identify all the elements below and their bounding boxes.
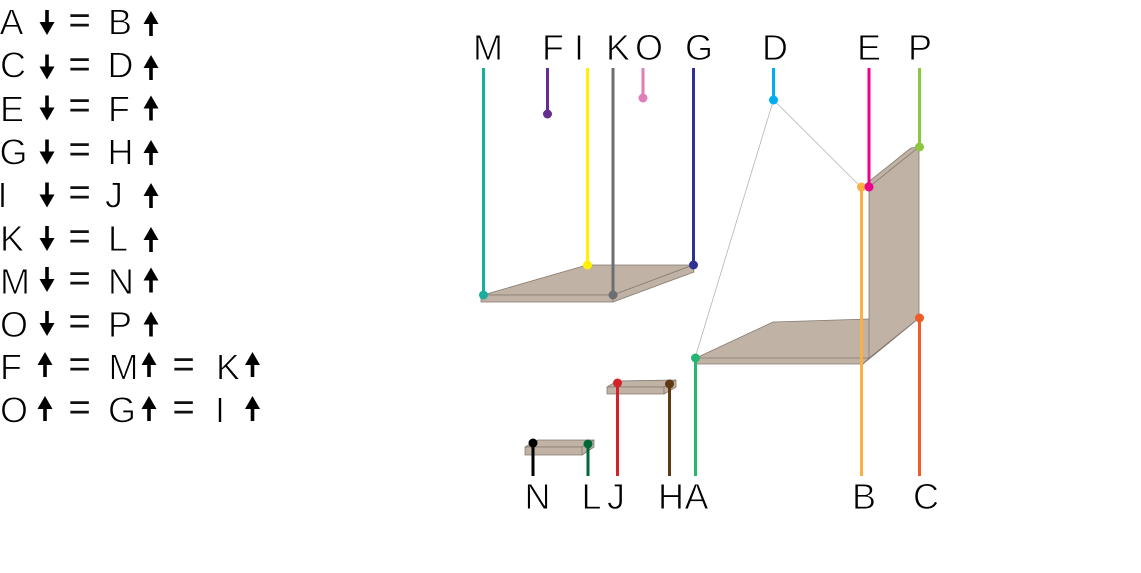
equation: O up equals G up equals I up: I [215,390,225,430]
equation: F up equals M up equals K up: = [68,344,91,386]
thin connector lines from D [695,100,861,358]
rope G [689,68,698,270]
rope K [608,68,618,300]
equation: A down equals B up [0,0,158,42]
rope B [857,182,866,476]
equation: E down equals F up: E [0,88,24,130]
diagram bottom labels: C [913,476,939,517]
diagram bottom labels: A [684,476,709,517]
rope D [769,68,778,104]
equation: E down equals F up [0,85,158,130]
rope J [613,378,622,476]
equation: G down equals H up [0,129,158,172]
diagram bottom labels: H [658,476,684,517]
rope N [528,438,538,476]
equation: E down equals F up: F [108,88,130,130]
equation: O down equals P up: = [68,301,91,343]
rope M [479,68,488,300]
equation: F up equals M up equals K up [0,344,260,388]
equation: F up equals M up equals K up: K [216,346,240,388]
diagram top labels: M [473,27,503,68]
equation: M down equals N up: = [68,258,91,300]
equation: M down equals N up [0,258,158,302]
equation: O down equals P up: O [0,304,28,345]
equation: A down equals B up: B [108,2,132,42]
rope F [543,68,552,118]
equation: G down equals H up: G [0,132,28,172]
equation: F up equals M up equals K up: F [0,346,22,388]
equation: A down equals B up: = [68,0,91,42]
equation: I down equals J up: J [105,174,123,216]
rope E [864,68,874,192]
diagram top labels: G [685,27,713,68]
equation: O up equals G up equals I up: O [0,390,28,430]
equation: K down equals L up: = [68,216,91,258]
diagram top labels: E [857,27,881,68]
diagram bottom labels: J [607,476,625,517]
equation: M down equals N up: N [108,261,134,302]
plate: smallest lower platform [525,440,594,455]
equation: K down equals L up: K [0,218,24,259]
diagram bottom labels: N [524,476,550,517]
diagram bottom labels: L [582,476,602,517]
equation: F up equals M up equals K up: M [108,346,138,388]
equation: O up equals G up equals I up: = [172,387,195,429]
equation: C down equals D up [0,44,158,86]
equation: O up equals G up equals I up: G [108,390,136,430]
equation: C down equals D up: D [108,44,134,86]
diagram top labels: O [635,27,663,68]
rope C [915,314,924,476]
plate: upper left platform [481,265,694,302]
equation: K down equals L up [0,216,158,259]
equation: O up equals G up equals I up: = [68,387,91,429]
equation: O up equals G up equals I up [0,387,260,430]
equation: K down equals L up: L [108,218,128,259]
diagram top labels: P [908,27,932,68]
diagram top labels: I [574,27,584,68]
diagram top labels: D [762,27,788,68]
diagram top labels: K [606,27,630,68]
plate: small middle platform [607,380,676,394]
rope I [583,68,592,270]
equation: O down equals P up: P [108,304,132,345]
diagram top labels [473,27,932,68]
equation: O down equals P up [0,301,158,345]
equation: C down equals D up: = [68,44,91,86]
diagram bottom labels [524,476,939,517]
equation: I down equals J up [0,172,158,216]
equation: F up equals M up equals K up: = [172,344,195,386]
equation: G down equals H up: H [108,132,134,172]
rope H [665,380,674,476]
equation: I down equals J up: = [68,172,91,214]
equation: A down equals B up: A [0,2,24,42]
equations legend [0,0,260,430]
equation: C down equals D up: C [0,44,26,86]
equation: E down equals F up: = [68,85,91,127]
diagram bottom labels: B [852,476,876,517]
equation: G down equals H up: = [68,129,91,171]
equation: M down equals N up: M [0,261,30,302]
plate: large folded floor and wall [696,147,919,364]
rope P [915,68,924,152]
rope O [638,68,648,102]
rope A [691,354,700,476]
rope L [584,440,592,476]
diagram top labels: F [542,27,564,68]
